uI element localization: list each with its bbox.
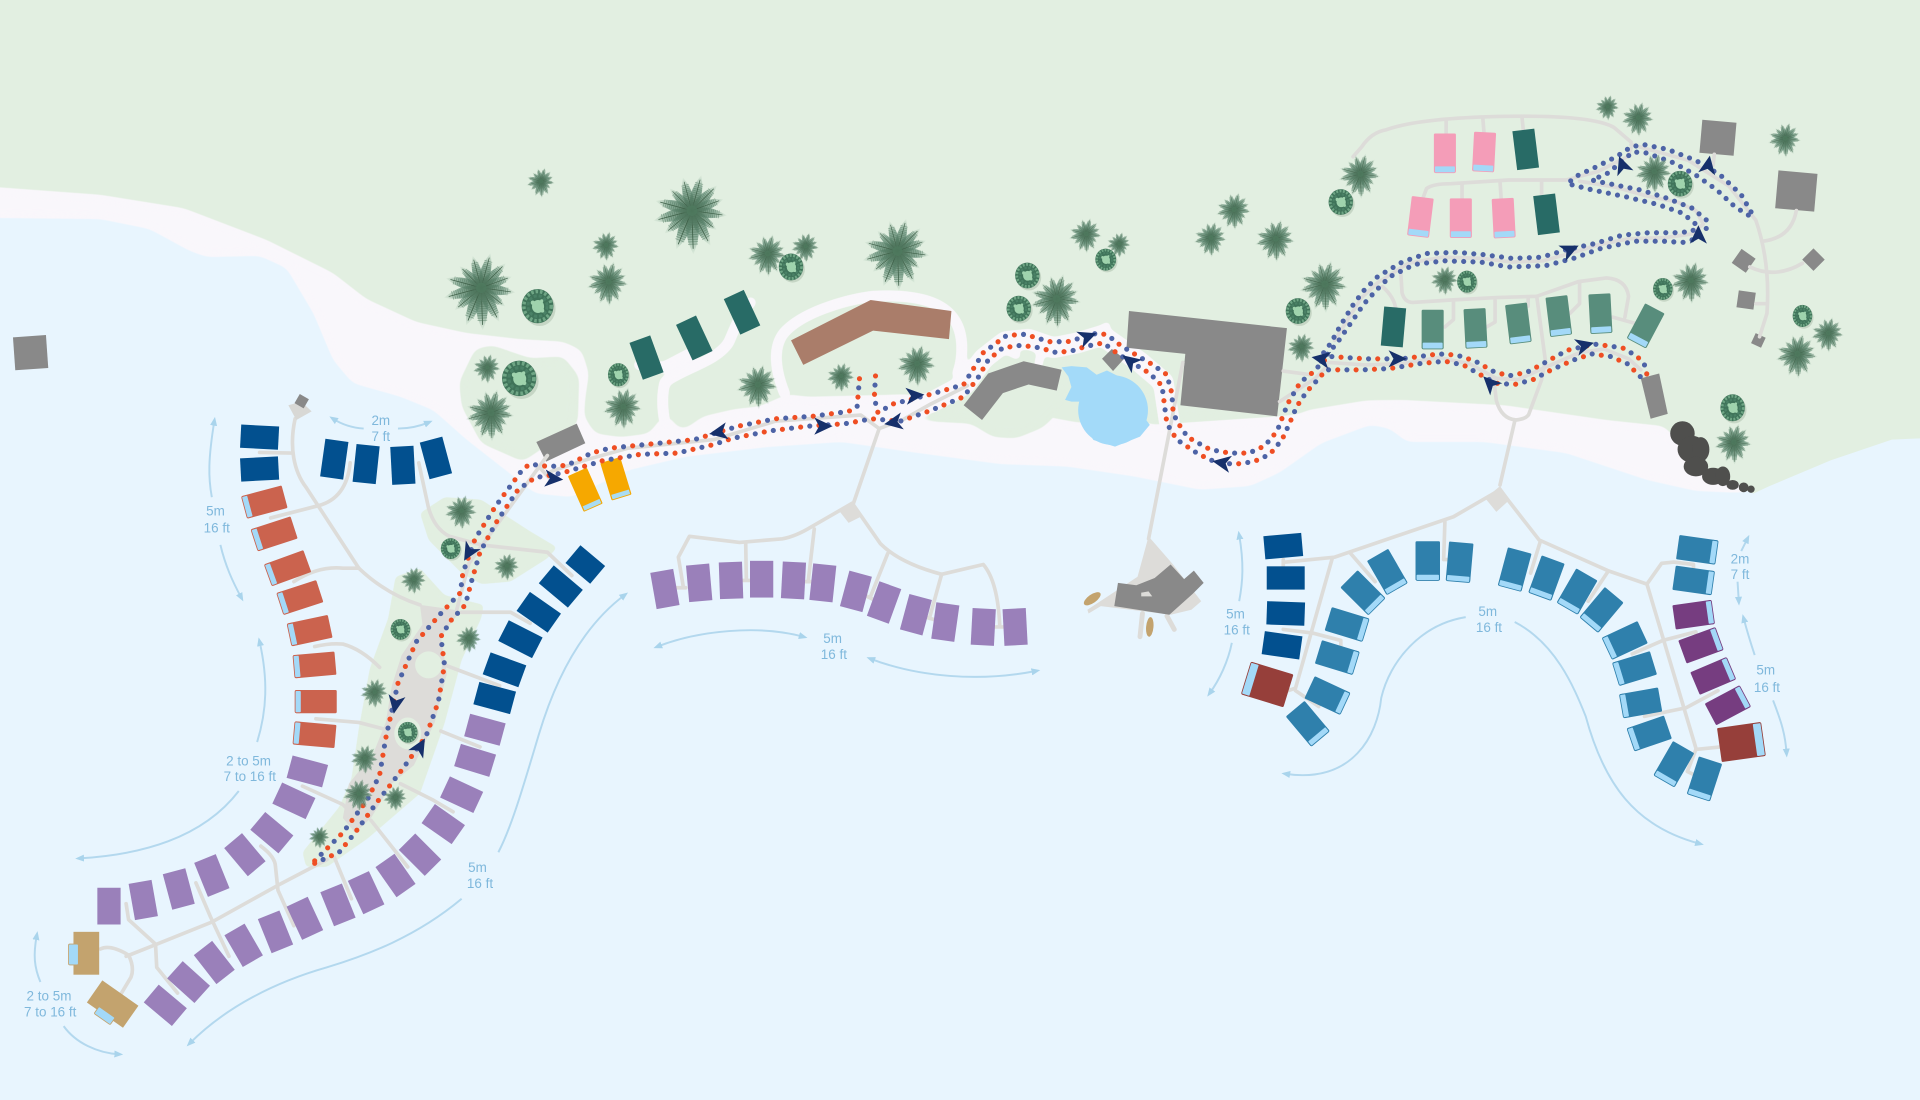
depth labels: 5m [1756,663,1775,678]
overwater dive centre [1082,536,1204,637]
depth labels: 5m [468,860,487,875]
depth labels: 16 ft [204,521,230,536]
east water villas [1241,533,1765,801]
land [0,0,1920,493]
depth labels: 5m [206,504,225,519]
small grey hut [295,394,309,408]
blue route to the north-east [1321,144,1751,361]
depth labels: 16 ft [1476,620,1502,635]
walking route: lower line [315,343,1641,863]
depth span arrows [35,419,1787,1054]
roads [100,116,1802,996]
water villas: west cluster [69,394,605,1032]
beach [0,184,1753,497]
depth labels [24,413,1780,1019]
west land islands [302,497,557,867]
land patch: by the main building [1136,367,1300,425]
building: brown lodge [791,300,951,365]
route direction arrows [385,153,1718,759]
depth labels: 16 ft [467,876,493,891]
depth labels: 7 to 16 ft [24,1004,77,1019]
palm trees [308,94,1844,850]
depth labels: 16 ft [1754,680,1780,695]
depth labels: 7 ft [371,429,390,444]
round trees [391,171,1814,744]
black rocks [1670,421,1755,493]
red villas [241,485,337,748]
depth labels: 5m [1478,604,1497,619]
depth labels: 16 ft [1224,622,1250,637]
tan villas [69,932,138,1032]
depth labels: 5m [823,631,842,646]
navy villas [240,425,605,714]
walking route: upper line to the spur [315,377,860,861]
yellow beach villas [568,457,632,512]
walking route: upper line from the spur eastward [874,333,1647,453]
land patch: lobe by the villas [459,345,579,462]
depth labels: 7 ft [1731,567,1750,582]
east garden villas [1381,129,1665,349]
depth labels: 16 ft [821,647,847,662]
teal hillside villas [629,290,760,380]
pool [1062,366,1150,447]
depth labels: 2 to 5m [226,753,271,768]
buildings [13,120,1825,462]
sandy trails [639,296,1169,422]
depth labels: 7 to 16 ft [224,769,276,784]
depth labels: 2m [1731,551,1749,566]
west central walkway area [343,605,460,833]
purple villas [97,714,506,1026]
central purple villas [650,561,1028,646]
depth labels: 5m [1226,606,1245,621]
land patch: lobe under the grey lodge [902,355,1078,438]
depth labels: 2m [371,413,390,428]
depth labels: 2 to 5m [27,988,71,1003]
